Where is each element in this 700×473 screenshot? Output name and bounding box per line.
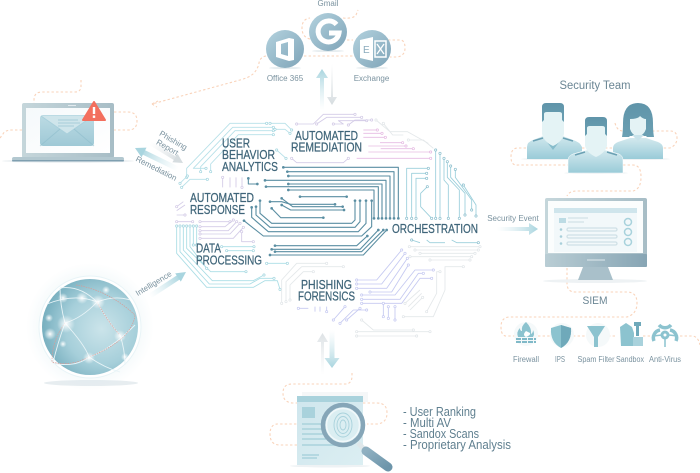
arrow: remediation — [135, 148, 178, 169]
security team — [521, 80, 670, 174]
icon: sandbox bucket and shovel — [620, 322, 643, 346]
label: data processing: DATA — [196, 242, 222, 256]
forensics list: - User Ranking — [403, 405, 476, 419]
label: phishing forensics: FORENSICS — [298, 290, 355, 304]
label: phishing report: Report — [155, 138, 181, 158]
label: security event: Security Event — [487, 214, 540, 223]
label: automated response: RESPONSE — [190, 203, 245, 217]
laptop with phishing alert — [2, 102, 134, 163]
forensics list: - Sandox Scans — [403, 427, 479, 441]
forensics list: - Proprietary Analysis — [403, 438, 511, 452]
brain circuit traces — [177, 114, 480, 336]
label: user behavior analytics — [222, 136, 278, 174]
label: anti-virus: Anti-Virus — [649, 355, 681, 364]
label: orchestration: ORCHESTRATION — [392, 222, 478, 236]
label: automated response: AUTOMATED — [190, 191, 254, 205]
email sources group — [266, 0, 391, 83]
label: automated remediation: AUTOMATED — [295, 129, 358, 143]
traces: orchestration region — [407, 150, 478, 243]
arrow: down to forensics — [324, 330, 340, 368]
icon: office 365 — [266, 30, 304, 69]
label: intelligence: Intelligence — [134, 269, 174, 298]
traces: automated response region — [177, 220, 253, 242]
security tools row — [513, 322, 681, 364]
person: man left — [521, 103, 585, 160]
traces: phishing forensics periwinkle region — [298, 250, 433, 323]
brain labels — [190, 129, 478, 304]
heading: security team: Security Team — [560, 80, 630, 92]
traces: automated remediation region — [177, 114, 372, 215]
label: phishing forensics — [298, 278, 355, 304]
label: remediation: Remediation — [134, 154, 178, 183]
traces: phishing forensics grey region — [282, 247, 480, 336]
label: exchange: Exchange — [354, 74, 390, 83]
icon: anti-virus biohazard — [653, 325, 678, 347]
label: ips: IPS — [555, 355, 565, 364]
traces: outer grey top right — [376, 120, 433, 148]
icon: ips shield — [550, 323, 574, 348]
icon: alert triangle — [83, 102, 105, 120]
icon: exchange: E — [363, 45, 370, 56]
label: automated remediation: REMEDIATION — [291, 140, 362, 154]
label: firewall: Firewall — [513, 355, 539, 364]
person: man centre — [564, 117, 628, 174]
arrow: intelligence — [150, 272, 186, 296]
icon: firewall — [514, 322, 538, 346]
laptop body — [2, 103, 134, 163]
label: data processing: PROCESSING — [196, 254, 262, 268]
icon: magnifier with fingerprint — [323, 405, 388, 467]
arrow: security event — [497, 223, 538, 235]
label: phishing forensics: PHISHING — [301, 278, 352, 292]
icon: gmail — [309, 13, 347, 52]
label: spam filter: Spam Filter — [578, 355, 615, 364]
forensics list — [403, 405, 511, 452]
siem dashboard window — [554, 208, 637, 252]
forensics document and magnifier — [290, 392, 388, 468]
label: siem: SIEM — [582, 295, 608, 307]
label: user behavior analytics: USER — [222, 136, 250, 150]
globe — [26, 263, 154, 391]
arrow: down from email sources — [327, 64, 337, 105]
traces: central dark bus — [244, 167, 398, 255]
traces: data processing region — [177, 226, 287, 289]
arrow: up from forensics — [317, 333, 328, 375]
forensics list: - Multi AV — [403, 416, 452, 430]
label: user behavior analytics: ANALYTICS — [222, 160, 278, 174]
envelope — [40, 115, 94, 146]
label: user behavior analytics: BEHAVIOR — [222, 148, 275, 162]
label: automated remediation — [291, 129, 362, 154]
label: office 365: Office 365 — [267, 74, 304, 83]
arrow: up to brain from email sources — [316, 69, 328, 110]
arrow: phishing report — [150, 143, 183, 163]
label: automated response — [190, 191, 254, 217]
person: woman — [606, 103, 670, 160]
label: sandbox: Sandbox — [616, 355, 644, 364]
label: data processing — [196, 242, 262, 268]
label: phishing report: Phishing — [158, 129, 189, 152]
siem monitor — [543, 198, 647, 283]
traces: user behavior analytics region — [180, 123, 292, 187]
icon: spam filter funnel — [586, 323, 610, 347]
